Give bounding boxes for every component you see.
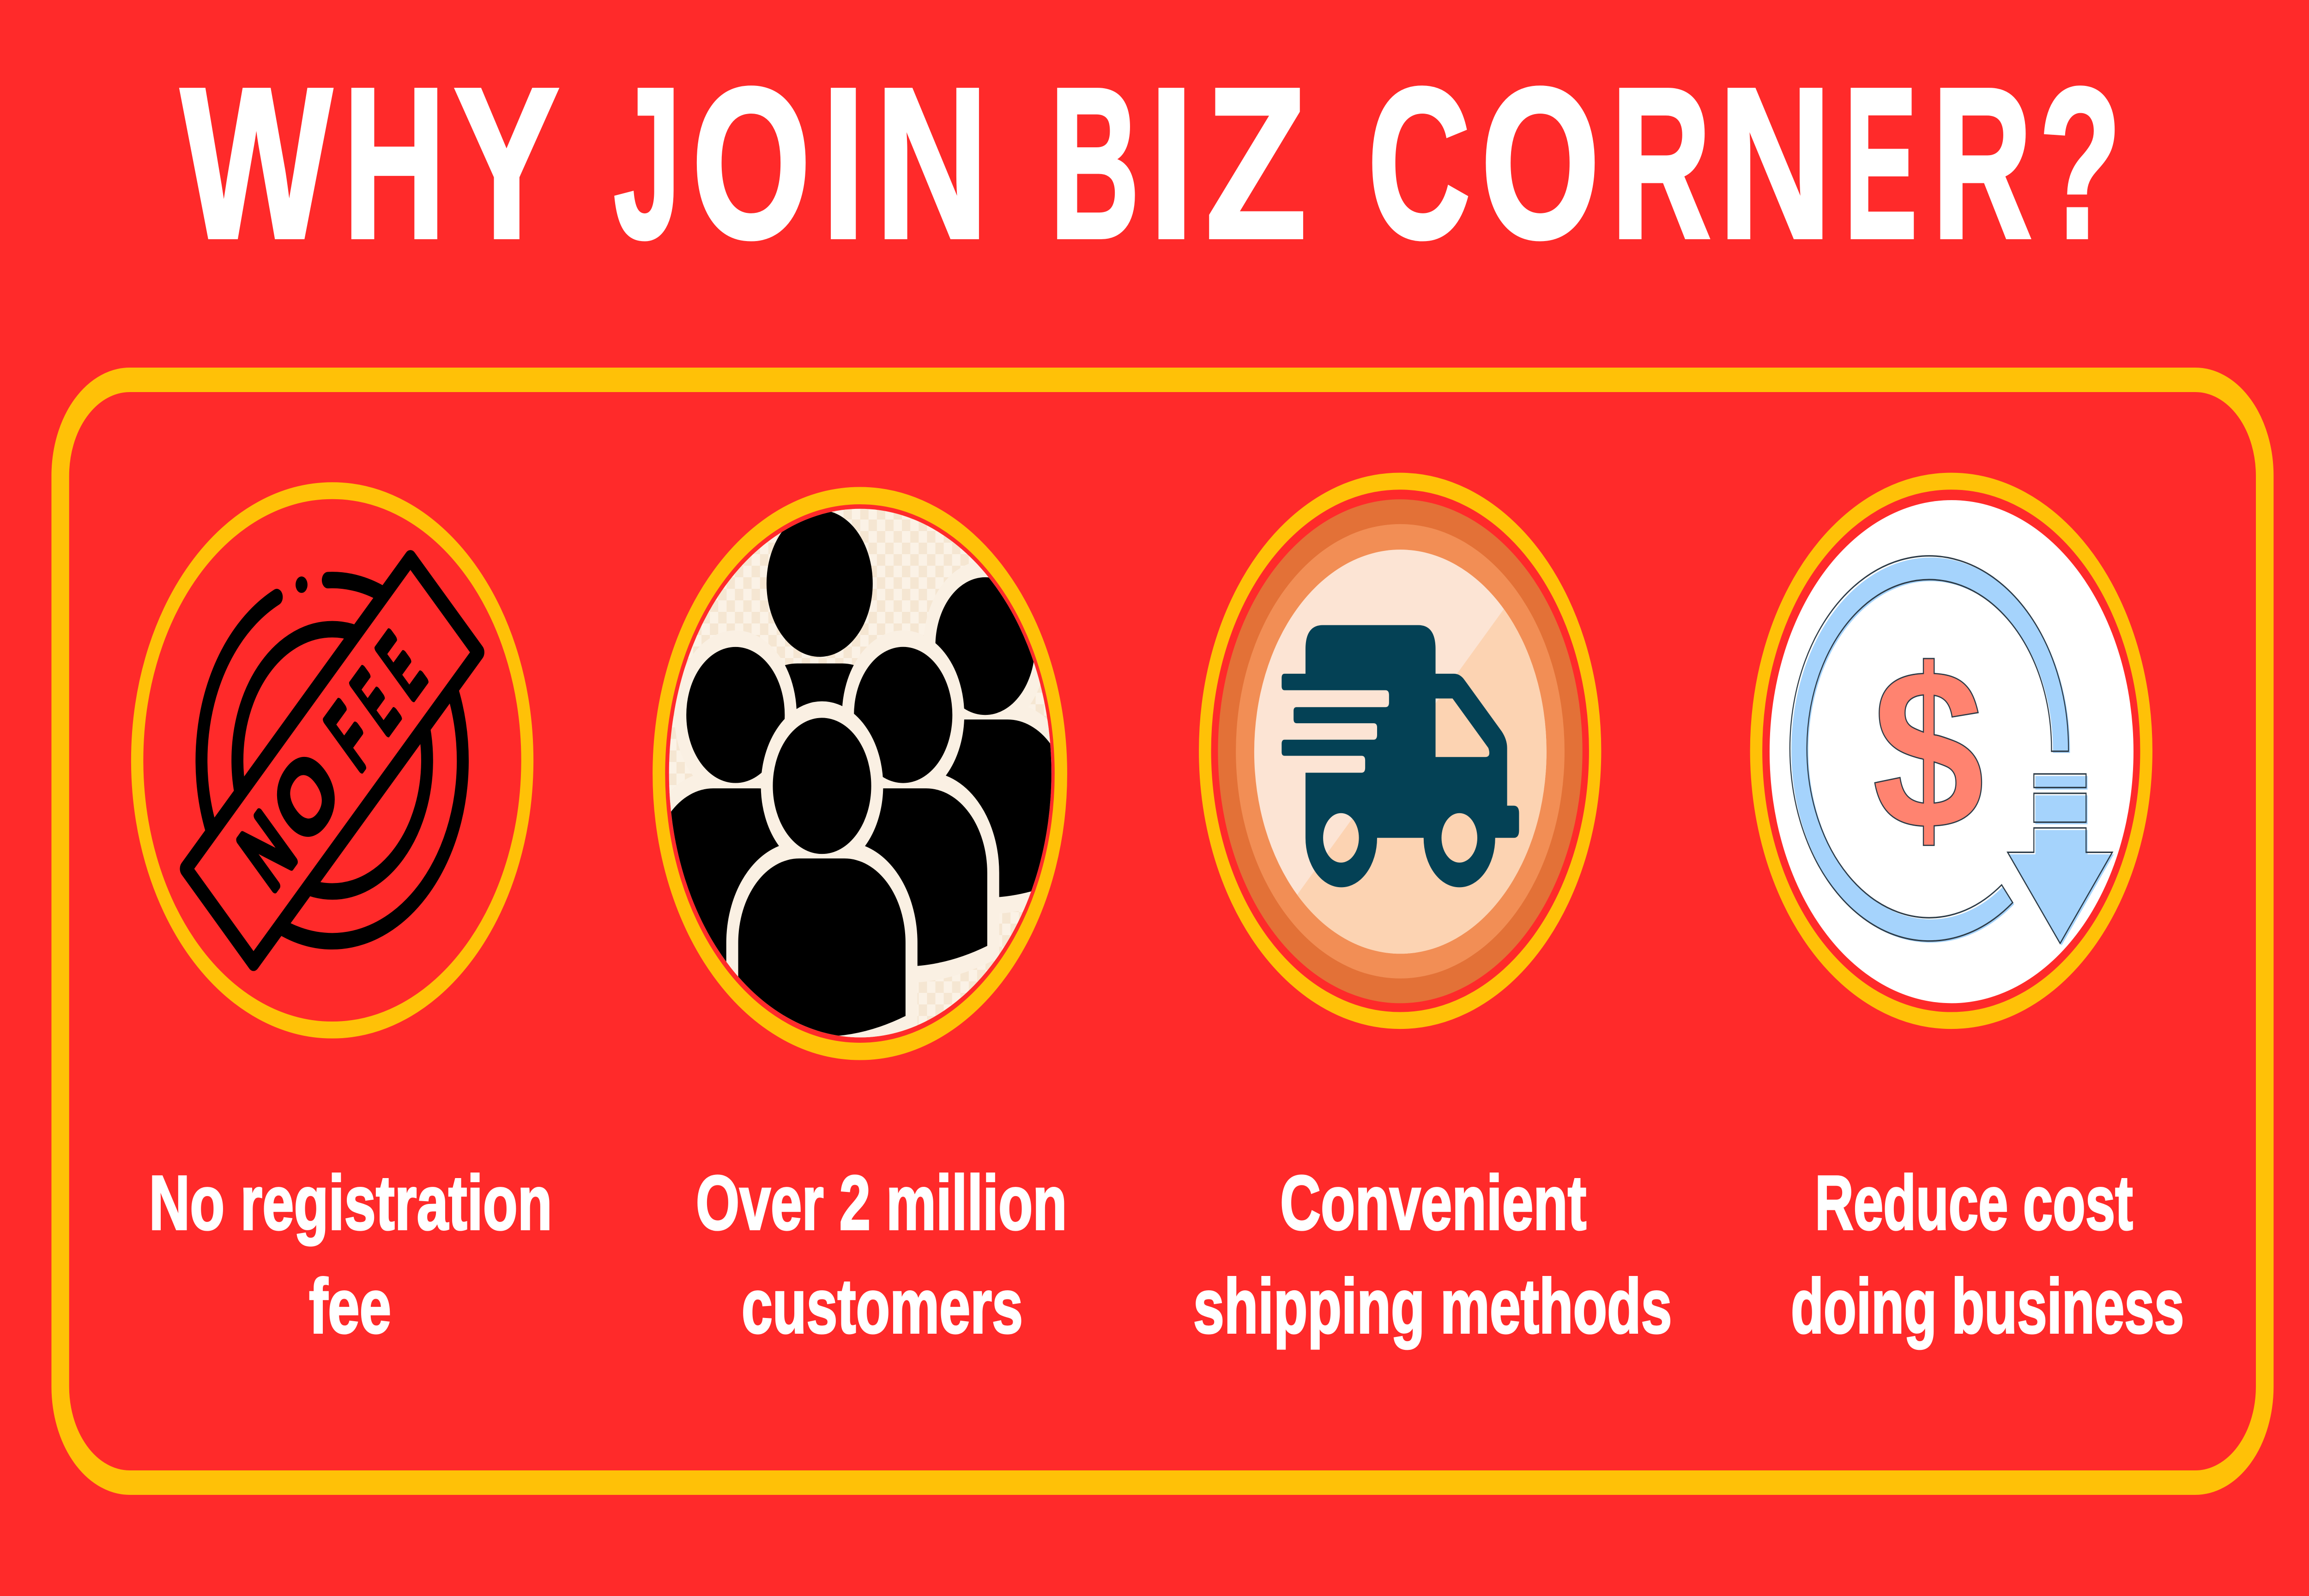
banner [186, 558, 478, 963]
title: C [1368, 43, 1470, 283]
title: O [1481, 43, 1600, 283]
caption: over 2 million customers: Over 2 million [696, 1160, 1067, 1246]
title: J [614, 43, 681, 283]
title: I [1149, 43, 1194, 283]
dollar sign: $ [1872, 622, 1984, 877]
banner text: O [259, 732, 353, 862]
title: N [876, 43, 988, 283]
caption: reduce cost doing business [1791, 1160, 2184, 1349]
caption: reduce cost doing business: Reduce cost [1815, 1160, 2133, 1246]
caption: reduce cost doing business: doing business [1791, 1263, 2184, 1349]
caption: convenient shipping methods: Convenient [1280, 1160, 1586, 1246]
title: I [822, 43, 865, 283]
circular arrow band [1790, 556, 2070, 943]
inner coin circle [237, 629, 427, 891]
yellow ring [1756, 481, 2146, 1021]
banner text: F [313, 685, 387, 788]
broken outer coin circle [201, 580, 463, 941]
pale inner disc [1254, 550, 1547, 954]
caption: convenient shipping methods [1193, 1160, 1672, 1349]
title: R [1611, 43, 1711, 283]
title: B [1050, 43, 1139, 283]
caption: over 2 million customers: customers [742, 1263, 1023, 1349]
white disc [1770, 500, 2134, 1003]
yellow ring [1205, 481, 1595, 1021]
title: H [343, 43, 446, 283]
orange outer disc [1218, 499, 1583, 1003]
title: O [692, 43, 811, 283]
title: Z [1206, 43, 1306, 283]
title: E [1844, 43, 1917, 283]
title: R [1932, 43, 2032, 283]
caption: over 2 million customers [696, 1160, 1067, 1349]
title: ? [2039, 43, 2121, 283]
yellow ring [659, 496, 1061, 1052]
caption: no registration fee [149, 1160, 552, 1349]
panel frame [60, 380, 2265, 1482]
inner disc shaded half [1297, 609, 1547, 954]
down arrow [2007, 774, 2114, 945]
title: N [1718, 43, 1831, 283]
icon: delivery truck [1205, 481, 1595, 1021]
truck [1281, 625, 1519, 887]
crowd image [669, 509, 1052, 1037]
caption: convenient shipping methods: shipping methods [1193, 1263, 1672, 1349]
orange middle disc [1236, 524, 1565, 979]
icon: customers crowd [652, 496, 1069, 1052]
title: Y [453, 43, 560, 283]
caption: no registration fee: No registration [149, 1160, 552, 1246]
banner text: E [339, 652, 411, 751]
title: W [181, 43, 333, 283]
coin dot [296, 576, 308, 593]
banner text: N [225, 793, 308, 908]
icon: no fee [137, 490, 527, 1030]
icon: reduce cost [1756, 481, 2146, 1021]
caption: no registration fee: fee [309, 1263, 391, 1349]
banner text: E [364, 615, 438, 716]
yellow ring [137, 490, 527, 1030]
